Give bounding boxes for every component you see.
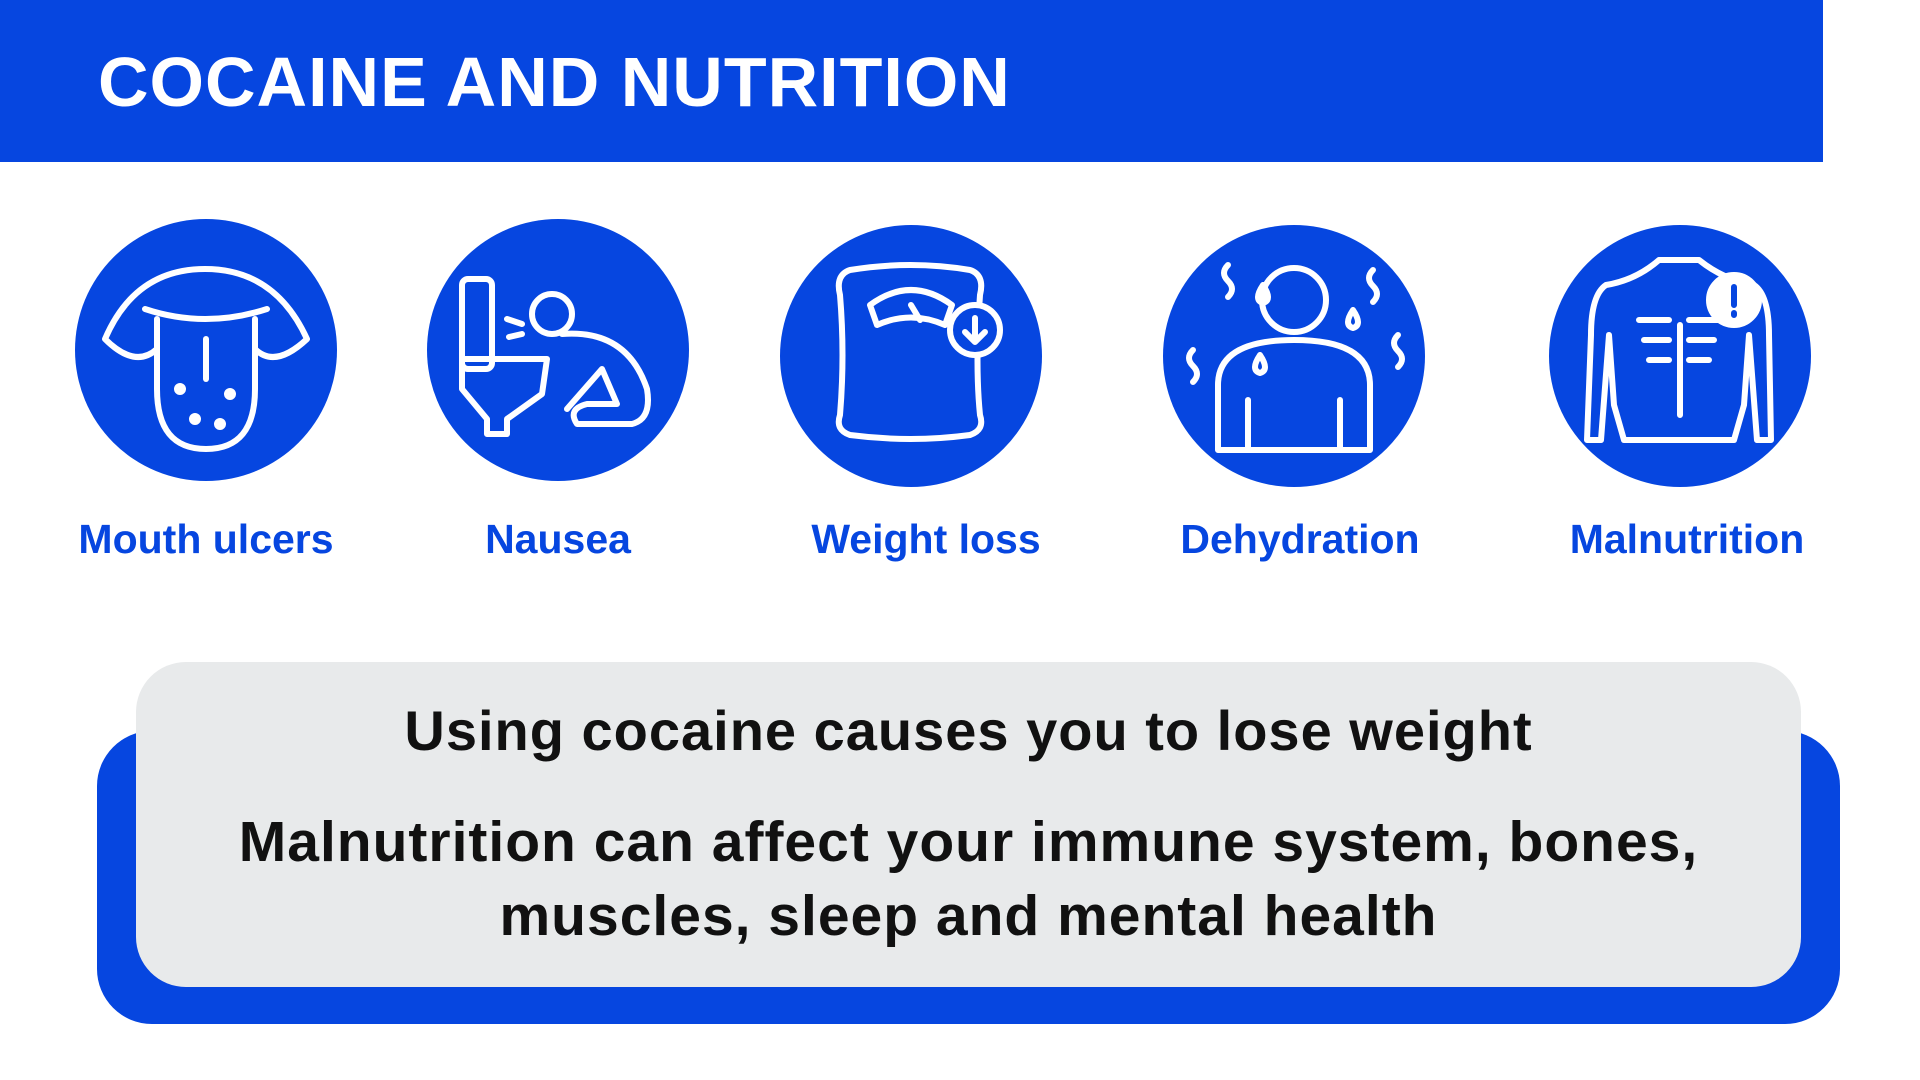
icon: mouth ulcers [75, 219, 337, 481]
label: malnutrition: Malnutrition [1570, 516, 1804, 562]
icon: nausea [427, 219, 689, 481]
text: weight: Using cocaine causes you to lose weight [404, 699, 1533, 762]
icon: dehydration [1163, 225, 1425, 487]
icon: weight loss [780, 225, 1042, 487]
header bar [0, 0, 1823, 162]
text: malnutrition effects: muscles, sleep and mental health [500, 884, 1438, 948]
icon: malnutrition [1549, 225, 1811, 487]
label: dehydration: Dehydration [1180, 516, 1420, 562]
text box [136, 662, 1801, 987]
title: COCAINE AND NUTRITION [98, 43, 1011, 121]
text: malnutrition effects [239, 810, 1698, 948]
label: weight loss: Weight loss [811, 516, 1041, 562]
label: nausea: Nausea [485, 516, 631, 562]
panel: key message [97, 731, 1840, 1024]
label: mouth ulcers: Mouth ulcers [78, 516, 334, 562]
text: malnutrition effects: Malnutrition can affect your immune system, bones, [239, 810, 1698, 874]
